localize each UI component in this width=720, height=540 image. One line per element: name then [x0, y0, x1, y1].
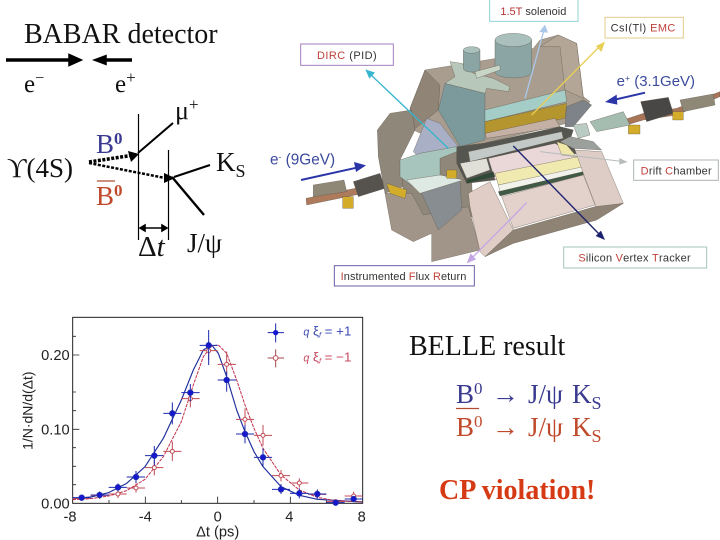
formula: B0 decay: 0	[474, 379, 483, 398]
arrow: muon track	[138, 123, 173, 153]
callout: Silicon Vertex Tracker: Silicon Vertex Tracker	[578, 253, 691, 265]
formula: B0 decay: J/ψ	[528, 379, 563, 409]
data: q xi = -1 points	[73, 342, 363, 504]
label: positron: +	[126, 68, 136, 87]
formula: B0 bar decay: 0	[474, 412, 483, 431]
formula: B0 bar decay: J/ψ	[528, 412, 563, 442]
backing behind the bore	[400, 147, 473, 217]
curve: q xi = +1	[73, 345, 363, 502]
arrow: positron beam	[97, 57, 132, 63]
left door	[377, 110, 415, 193]
cryostat	[495, 40, 532, 78]
plot frame	[73, 317, 363, 503]
formula: B0 bar decay	[456, 408, 602, 446]
DIRC panel	[438, 83, 485, 147]
bore	[457, 127, 577, 183]
label: positron beam energy: (3.1GeV)	[630, 73, 695, 90]
arrow: dashed B0 path	[89, 151, 139, 162]
callout: Drift Chamber: Drift Chamber	[641, 165, 712, 177]
arrow: DIRC pointer	[365, 69, 448, 148]
mirrors	[413, 118, 458, 158]
label: B0: B	[96, 129, 114, 159]
beamlines	[306, 92, 720, 208]
arrow: dashed B0 bar path	[89, 163, 175, 183]
arrow: electron beam	[6, 56, 79, 64]
arrow: K short track	[174, 165, 210, 177]
callout: CsI(Tl) EMC	[605, 17, 683, 38]
legend: minus one: = −1	[321, 349, 351, 364]
legend: plus one: = +1	[321, 323, 351, 338]
label: delta t: Δt	[138, 231, 166, 263]
arrow: solenoid pointer	[525, 25, 548, 98]
label: electron: e	[24, 71, 35, 98]
label: electron: −	[35, 70, 44, 87]
callout: DIRC (PID)	[301, 44, 393, 65]
x axis tick labels	[63, 509, 366, 525]
curve: q xi = -1	[73, 345, 363, 502]
formula: B0 decay: B	[456, 379, 474, 409]
formula: B0 bar decay: K	[572, 412, 592, 442]
formula: B0 decay: →	[492, 379, 519, 409]
callout: DIRC (PID): DIRC (PID)	[317, 50, 377, 62]
x axis tick labels: -8	[63, 509, 77, 525]
legend: minus one	[268, 349, 351, 367]
arrow: EMC pointer	[532, 42, 605, 115]
x axis tick labels: 4	[285, 509, 293, 525]
arrow: electron beam direction	[301, 162, 366, 180]
callout: Silicon Vertex Tracker	[564, 247, 707, 268]
drift chamber	[488, 143, 580, 180]
lower left block	[385, 193, 480, 262]
y axis tick labels	[41, 348, 70, 513]
axis ticks	[73, 336, 326, 503]
label: electron beam energy: -	[279, 151, 282, 161]
x axis tick labels: 8	[358, 509, 366, 525]
legend: plus one: q ξ	[303, 323, 319, 338]
label: muon: +	[189, 95, 199, 114]
formula: B0 bar decay: S	[592, 426, 602, 446]
data: q xi = +1 points	[73, 330, 363, 505]
callout: Drift Chamber	[634, 160, 718, 180]
formula: B0 bar decay: →	[492, 412, 519, 442]
label: positron beam energy: +	[625, 73, 630, 83]
title: BABAR detector: BABAR detector	[24, 19, 218, 50]
vertical time lines	[138, 114, 168, 240]
callout: 1.5T solenoid	[490, 0, 578, 21]
callout: Instrumented Flux Return	[334, 266, 474, 286]
x axis tick labels: -4	[139, 509, 152, 525]
label: muon: μ	[175, 96, 189, 125]
formula: B0 bar decay: B	[456, 412, 474, 442]
label: B0 bar: B	[96, 181, 114, 211]
legend	[268, 323, 351, 367]
y axis tick labels: 0.10	[41, 422, 70, 438]
solenoid and EMC layers	[485, 90, 567, 122]
panel: BABAR decay diagram	[6, 19, 246, 263]
lower pink yoke	[468, 182, 513, 257]
formula: B0 decay: S	[592, 393, 602, 413]
label: electron beam energy: e	[270, 151, 279, 168]
arrow: drift chamber pointer	[540, 152, 628, 165]
legend: plus one	[268, 323, 351, 342]
yellow supports	[387, 170, 457, 198]
callout: CsI(Tl) EMC: CsI(Tl) EMC	[611, 23, 675, 35]
label: B0 bar: 0	[114, 181, 123, 200]
y axis tick labels: 0.20	[41, 348, 70, 364]
label: B0 bar	[96, 181, 123, 211]
label: electron beam energy: (9GeV)	[281, 151, 335, 168]
legend: minus one: f	[319, 356, 322, 365]
callout: Instrumented Flux Return: Instrumented Flux Return	[341, 271, 466, 283]
arrow: positron beam direction	[605, 93, 645, 105]
arrow: silicon tracker pointer	[513, 146, 605, 240]
label: B0: 0	[114, 129, 123, 148]
label: positron beam energy: e	[617, 73, 625, 90]
panel: detector illustration	[270, 0, 720, 286]
label: J/psi: J/ψ	[187, 228, 222, 258]
panel: asymmetry chart	[20, 317, 366, 540]
legend: plus one: f	[319, 330, 322, 339]
callout: 1.5T solenoid: 1.5T solenoid	[500, 6, 566, 18]
arrow: flux return pointer	[467, 203, 527, 263]
callout: CP violation: CP violation!	[439, 475, 595, 506]
heading: BELLE result: BELLE result	[409, 331, 566, 362]
y axis tick labels: 0.00	[41, 497, 70, 513]
arrow: delta t span	[140, 225, 167, 231]
detector body	[377, 33, 630, 262]
label: Upsilon 4S: ϒ(4S)	[7, 153, 73, 183]
right end parts	[560, 137, 602, 150]
panel: BELLE result text	[409, 331, 602, 506]
label: positron: e	[115, 71, 126, 98]
legend: minus one: q ξ	[303, 349, 319, 364]
arrow: J/psi track	[172, 177, 204, 215]
formula: B0 decay: K	[572, 379, 592, 409]
label: K short: K	[216, 147, 236, 177]
upper yoke	[410, 35, 590, 147]
label: K short: S	[236, 161, 246, 181]
y axis title: 1/N·dN/d(Δt)	[20, 371, 36, 450]
x axis tick labels: 0	[214, 509, 222, 525]
